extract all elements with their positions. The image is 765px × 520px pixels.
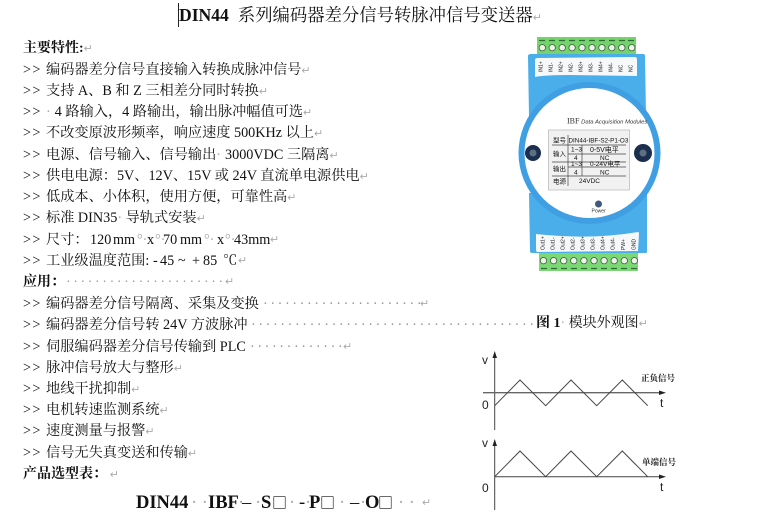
title: DIN44 系列编码器差分信号转脉冲信号变送器↵ (179, 5, 542, 25)
input labels: IN4- (608, 62, 614, 72)
text block: feature list: 43mm (234, 232, 270, 248)
text block: feature list: ~ (178, 253, 186, 269)
text block: application list: >> (23, 381, 42, 397)
model code: - (299, 493, 305, 513)
text block: application list: ······················ (263, 296, 424, 312)
spec label table: DIN44-IBF-S2-P1-O3 (568, 138, 629, 144)
input labels: IN2+ (558, 61, 564, 72)
text block: feature list: >> (23, 125, 42, 141)
power indicator (592, 200, 606, 214)
model code: · (238, 493, 244, 513)
heading: product selection: 产品选型表： ↵ (23, 467, 119, 482)
input labels: IN3- (588, 62, 594, 72)
text block: application list: >> (23, 423, 42, 439)
mounting screws (525, 144, 652, 162)
heading: applications: ······················ (66, 275, 226, 290)
heading: applications (23, 274, 234, 290)
waveform chart: unipolar signal: 0 (482, 481, 489, 495)
text block: feature list: 不改变原波形频率，响应速度 500KHz 以上↵ (46, 125, 323, 141)
spec label table: NC (600, 170, 610, 176)
text block: feature list: 45 (160, 253, 174, 269)
text block: feature list: >> (23, 168, 42, 184)
model code: □ (378, 492, 393, 513)
text block: feature list: ↵ (238, 255, 247, 267)
text block: feature list: 电源、信号输入、信号输出· 3000VDC 三隔离↵ (46, 147, 339, 163)
waveform chart: bipolar signal: 0 (482, 398, 489, 412)
waveform chart: unipolar signal: t (660, 480, 664, 494)
text block: feature list: °· (137, 232, 147, 248)
output labels: Out1- (550, 237, 556, 250)
spec label table (548, 130, 630, 190)
text block: feature list: 70 (163, 232, 177, 248)
model code: · (360, 493, 366, 513)
heading: main features: 主要特性:↵ (23, 41, 93, 56)
text block: application list: >> (23, 360, 42, 376)
spec label table: 1~3 (571, 146, 582, 154)
text block: feature list: °· (225, 232, 235, 248)
waveform chart: bipolar signal (482, 351, 676, 430)
figure caption: 图 1· 模块外观图↵ (536, 316, 648, 331)
spec label table: 电源 (553, 176, 566, 186)
model code: O (365, 493, 379, 513)
text block: feature list: >> (23, 253, 42, 269)
text block: feature list: 120 (90, 232, 111, 248)
text block: feature list: + (192, 253, 200, 269)
text block: application list (23, 296, 544, 461)
text block: feature list: 供电电源：5V、12V、15V 或 24V 直流单电源供电↵ (46, 168, 369, 184)
text block: feature list (23, 62, 369, 269)
text block: application list: 编码器差分信号隔离、采集及变换 (46, 296, 259, 312)
model code: · (339, 493, 345, 513)
model code: IBF (208, 493, 239, 513)
input labels: IN1+ (538, 61, 544, 72)
text block: application list: 伺服编码器差分信号传输到 PLC (46, 339, 246, 355)
text block: application list: >> (23, 402, 42, 418)
bottom green terminal (539, 253, 638, 271)
model code: · (305, 493, 311, 513)
spec label table: 0-5V电平 (590, 145, 619, 154)
output labels: PW+ (621, 239, 627, 250)
text block: feature list: >> (23, 83, 42, 99)
input labels: IN2- (568, 62, 574, 72)
model code: · · (191, 493, 208, 513)
model code: S (261, 493, 271, 513)
text block: feature list: 编码器差分信号直接输入转换成脉冲信号↵ (46, 62, 311, 78)
input labels: NC (618, 64, 624, 72)
output labels: Out3- (590, 237, 596, 250)
model code: – (350, 493, 359, 513)
text block: application list: 脉冲信号放大与整形↵ (46, 360, 183, 376)
text block: feature list: >> (23, 104, 42, 120)
text block: feature list: >> (23, 189, 42, 205)
spec label table: NC (600, 155, 610, 162)
text block: application list: ············· (250, 339, 345, 355)
text block: application list: 信号无失真变送和传输↵ (46, 445, 197, 461)
output labels (540, 236, 638, 250)
model code: □ (320, 492, 335, 513)
waveform chart: bipolar signal: 正负信号 (641, 372, 676, 384)
text block: application list: ········································ (251, 317, 544, 333)
model code: · (289, 493, 295, 513)
text block: feature list: · 4 路输入，4 路输出，输出脉冲幅值可选↵ (46, 104, 312, 120)
text block: application list: ↵ (343, 341, 352, 353)
text block: application list: >> (23, 445, 42, 461)
text block: feature list: >> (23, 62, 42, 78)
model code: – (242, 493, 251, 513)
output labels: Out3+ (580, 236, 586, 250)
text block: feature list: mm (180, 232, 202, 248)
output labels: Out4+ (600, 236, 606, 250)
text block: feature list: - (153, 253, 158, 269)
spec label table: 4 (574, 155, 578, 162)
model code: P (309, 493, 320, 513)
text block: feature list: 85 (203, 253, 217, 269)
input labels: IN1- (548, 62, 554, 72)
output labels: GND (632, 238, 638, 250)
text block: application list: 编码器差分信号转 24V 方波脉冲 (46, 317, 248, 333)
text block: feature list: °· (204, 232, 214, 248)
spec label table: 输入 (553, 149, 566, 158)
output labels: Out2+ (560, 236, 566, 250)
model code (136, 492, 431, 513)
spec label table: 4 (574, 170, 578, 176)
text block: feature list: 支持 A、B 和 Z 三相差分同时转换↵ (46, 83, 268, 99)
text block: feature list: >> (23, 232, 42, 248)
blue housing (518, 54, 660, 253)
text block: feature list: 工业级温度范围: (46, 253, 149, 269)
text block: application list: >> (23, 317, 42, 333)
waveform chart: unipolar signal: v (482, 436, 488, 450)
spec label table: 输出 (553, 164, 566, 173)
brand text: IBF Data Acquisition Modules (567, 116, 647, 126)
spec label table: 1~3 (571, 161, 582, 168)
input labels: IN4+ (598, 61, 604, 72)
spec label table: 0-24V电平 (590, 159, 621, 168)
text block: feature list: >> (23, 147, 42, 163)
text block: feature list: x (217, 232, 224, 248)
text block: application list: 地线干扰抑制↵ (46, 381, 140, 397)
text block: application list: 电机转速监测系统↵ (46, 402, 169, 418)
waveform chart: unipolar signal (482, 436, 677, 510)
text block: application list: >> (23, 339, 42, 355)
text block: feature list: 尺寸： (46, 232, 89, 248)
top green terminal (537, 37, 636, 55)
text block: feature list: x (147, 232, 154, 248)
text block: feature list: mm (113, 232, 135, 248)
output labels: Out2- (570, 237, 576, 250)
input labels: IN3+ (578, 61, 584, 72)
text block: feature list: °· (155, 232, 165, 248)
waveform chart: bipolar signal: v (482, 353, 488, 367)
model code: DIN44 (136, 493, 188, 513)
model code: · · (398, 493, 415, 513)
text block: feature list: ↵ (270, 234, 279, 246)
heading: applications: ↵ (225, 276, 234, 288)
text block: feature list: 低成本、小体积，使用方便，可靠性高↵ (46, 189, 296, 205)
output labels: Out1+ (540, 236, 546, 250)
waveform chart: bipolar signal: t (660, 396, 664, 410)
text block: feature list: ℃ (223, 253, 237, 269)
model code: · (255, 493, 261, 513)
text block: application list: ↵ (420, 298, 429, 310)
output labels: Out4- (610, 237, 616, 250)
power indicator: Power (592, 208, 606, 214)
waveform chart: unipolar signal: 单端信号 (642, 456, 677, 468)
heading: applications: 应用： (23, 275, 65, 290)
spec label table: 24VDC (579, 178, 600, 185)
text block: feature list: 标准 DIN35· 导轨式安装↵ (46, 210, 206, 226)
input labels: NC (628, 64, 634, 72)
model code: □ (272, 492, 287, 513)
text block: feature list: >> (23, 210, 42, 226)
input labels (538, 61, 634, 72)
text block: application list: 速度测量与报警↵ (46, 423, 155, 439)
spec label table: 型号 (553, 136, 566, 144)
model code: ↵ (422, 497, 431, 509)
text block: application list: >> (23, 296, 42, 312)
